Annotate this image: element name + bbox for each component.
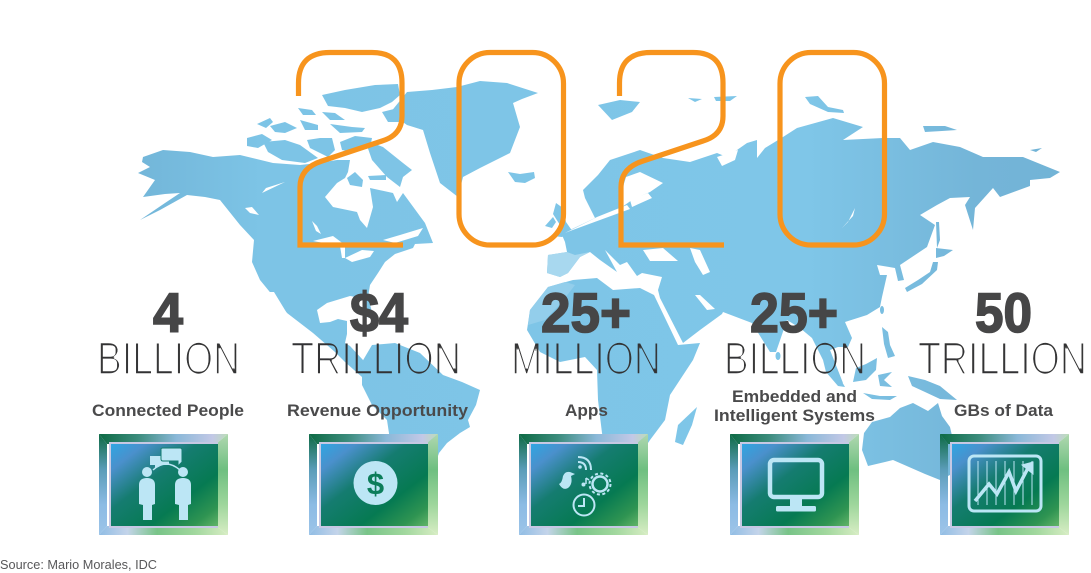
Japan xyxy=(905,262,938,292)
Eurasia xyxy=(547,118,1060,383)
stat: $4 trillion revenue opportunity: $4 xyxy=(350,281,408,344)
source note: Source: Mario Morales, IDC xyxy=(0,558,157,572)
icon: monitor xyxy=(730,434,859,535)
stat: 50 trillion GBs of data: 50 xyxy=(975,281,1032,344)
Svalbard and Arctic islands xyxy=(598,100,640,120)
stat: 4 billion connected people xyxy=(92,281,244,420)
icon: rising chart xyxy=(940,434,1069,535)
Australia xyxy=(862,403,960,480)
stat: 25+ billion embedded and intelligent systems xyxy=(714,281,875,425)
stat: $4 trillion revenue opportunity: Revenue Opportunity xyxy=(287,401,469,420)
icon: dollar coin xyxy=(309,434,438,535)
Britain and Ireland xyxy=(552,203,573,237)
Philippines xyxy=(882,327,895,358)
stat: 25+ billion embedded and intelligent systems: Intelligent Systems xyxy=(714,406,875,425)
Sri Lanka xyxy=(776,352,780,360)
stat: 25+ million apps: 25+ xyxy=(541,281,631,344)
Greenland xyxy=(390,81,538,197)
stat: $4 trillion revenue opportunity xyxy=(287,281,469,420)
inland seas and bays xyxy=(245,150,855,315)
stat: $4 trillion revenue opportunity: TRILLION xyxy=(291,333,461,384)
stat: 25+ million apps: MILLION xyxy=(511,333,661,384)
Sumatra xyxy=(823,360,845,387)
Arctic Canada islands xyxy=(322,84,400,112)
Borneo xyxy=(853,358,877,382)
Java xyxy=(863,393,897,400)
icon: connected people xyxy=(99,434,228,535)
icon: apps xyxy=(519,434,648,535)
Sulawesi xyxy=(878,372,892,387)
North America xyxy=(138,150,433,377)
stat: 4 billion connected people: Connected People xyxy=(92,401,244,420)
Taiwan xyxy=(880,306,884,314)
Madagascar xyxy=(675,407,697,445)
icon: dollar coin: $ xyxy=(367,466,384,501)
stat: 25+ million apps: Apps xyxy=(565,401,608,420)
stat: 4 billion connected people: 4 xyxy=(153,281,183,344)
stat: 25+ billion embedded and intelligent systems: BILLION xyxy=(724,333,866,384)
Iceland xyxy=(508,172,535,183)
stat: 50 trillion GBs of data: GBs of Data xyxy=(954,401,1054,420)
title: 2020 xyxy=(298,52,884,245)
western Europe lighter tint xyxy=(528,252,590,325)
stat: 25+ billion embedded and intelligent systems: 25+ xyxy=(750,281,838,344)
world map xyxy=(138,81,1060,480)
South America xyxy=(362,343,480,480)
Sakhalin xyxy=(936,222,940,248)
Africa xyxy=(527,278,700,480)
stat: 25+ million apps xyxy=(511,281,661,420)
New Guinea xyxy=(908,376,957,400)
Hokkaido xyxy=(936,248,953,258)
stat: 4 billion connected people: BILLION xyxy=(97,333,240,384)
stat: 25+ billion embedded and intelligent systems: Embedded and xyxy=(732,387,857,406)
stat: 50 trillion GBs of data xyxy=(918,281,1087,420)
